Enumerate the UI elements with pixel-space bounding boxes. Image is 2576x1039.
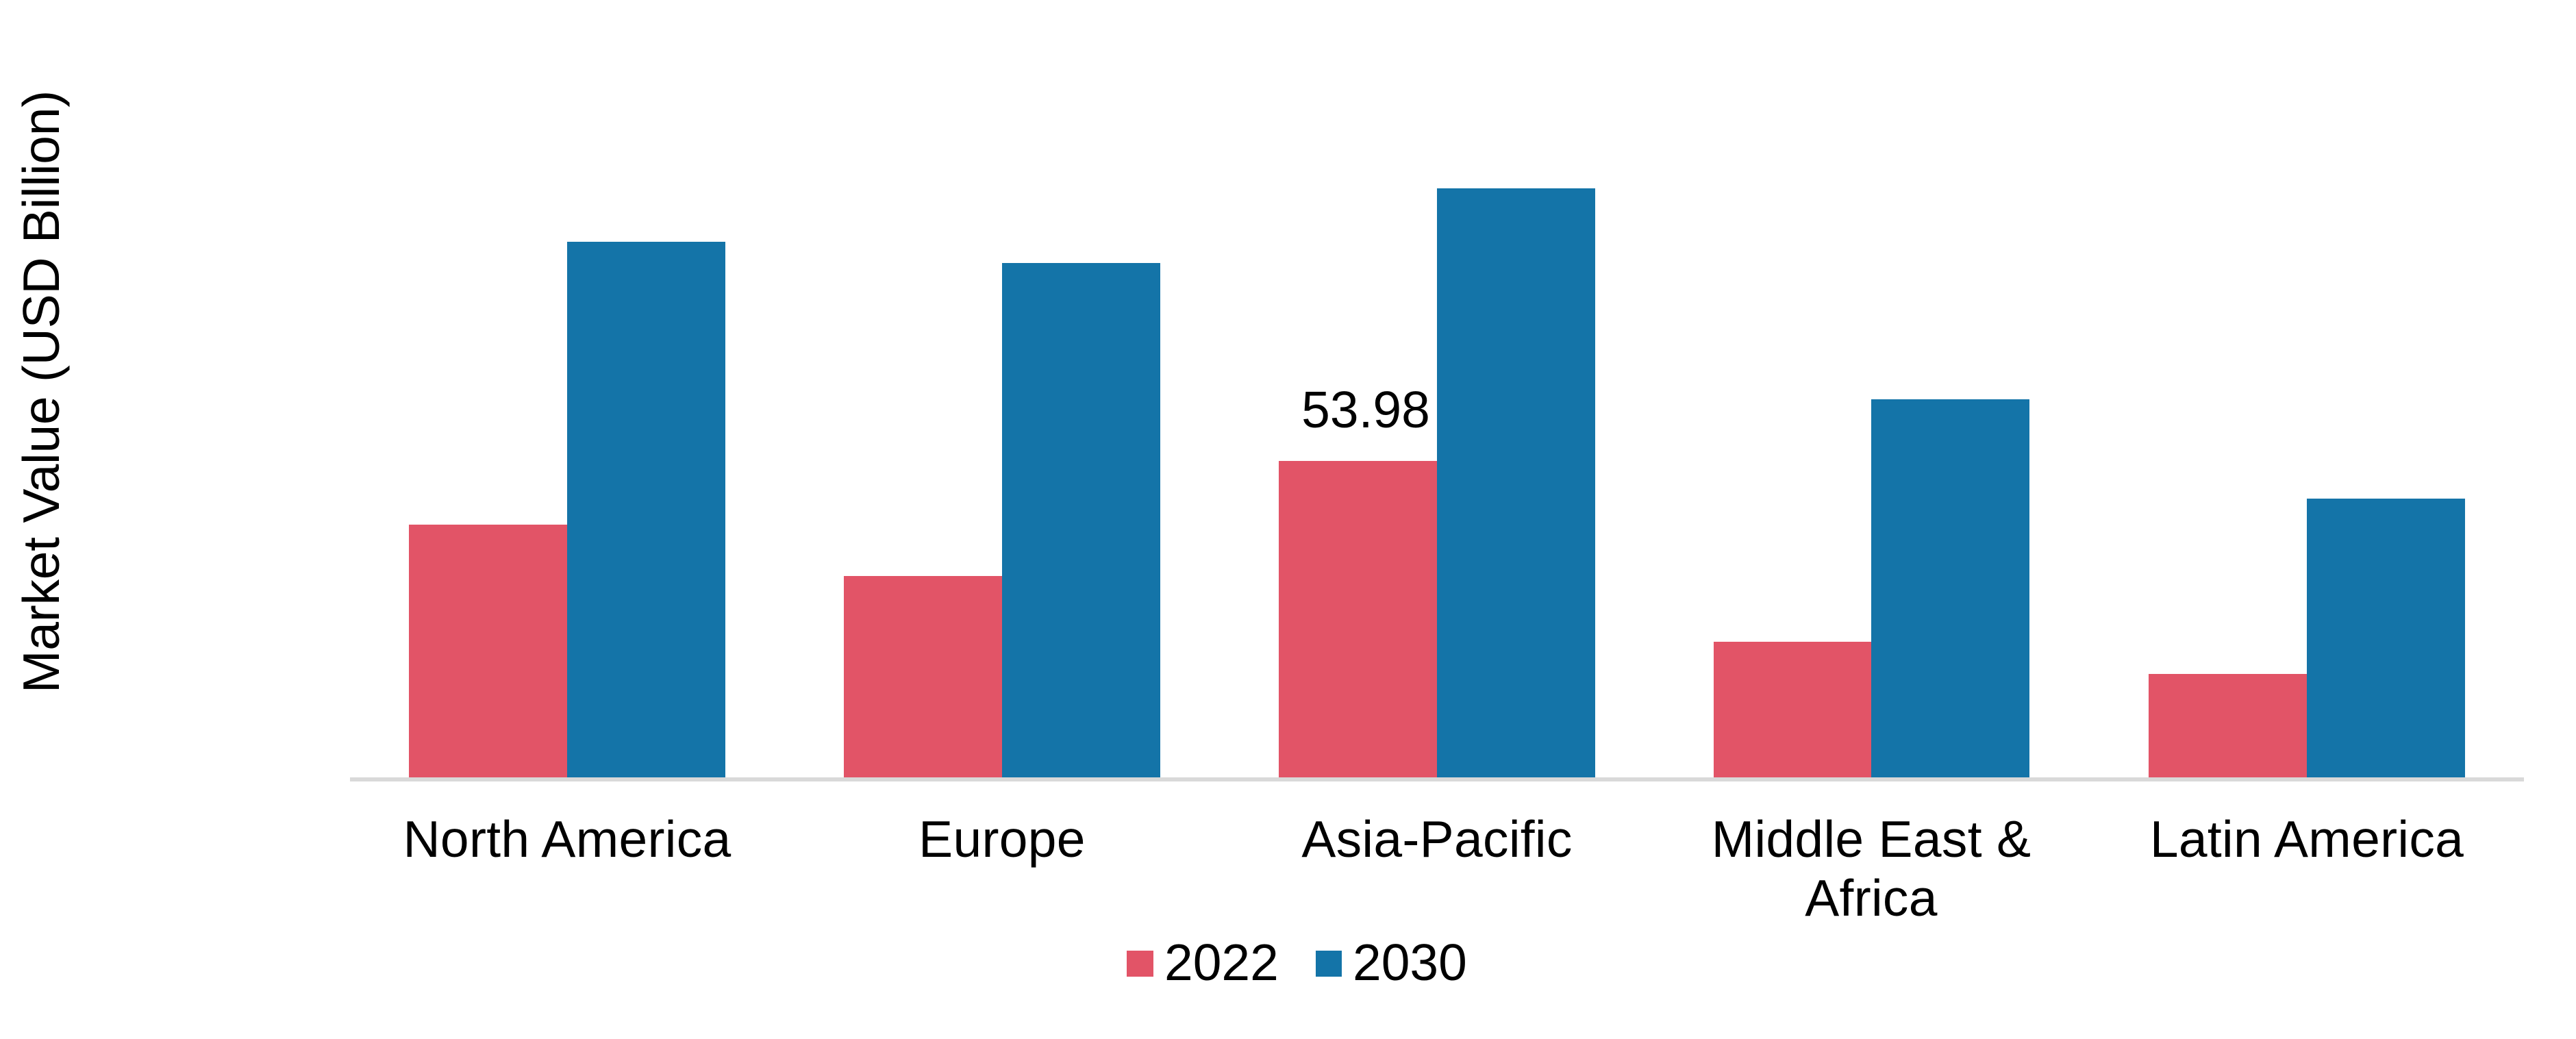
legend: 2030	[1353, 934, 1467, 991]
category labels: Asia-Pacific	[1301, 810, 1573, 868]
data label: Asia-Pacific 2022: 53.98	[1301, 381, 1430, 438]
legend: 2022	[1164, 934, 1279, 991]
category labels: Middle East &	[1712, 810, 2031, 868]
category labels: North America	[403, 810, 731, 868]
bars: Asia-Pacific	[1279, 188, 1595, 777]
x-axis line	[350, 777, 2524, 781]
bars: Middle East & Africa	[1714, 399, 2029, 777]
category labels	[403, 810, 2464, 927]
legend	[1127, 934, 1467, 991]
bars: Europe	[844, 263, 1160, 777]
bars: North America	[409, 242, 725, 777]
category labels: Latin America	[2150, 810, 2464, 868]
category labels: Africa	[1805, 869, 1938, 927]
category labels: Europe	[918, 810, 1086, 868]
y-axis title: Market Value (USD Billion)	[12, 90, 70, 693]
bars: Latin America	[2149, 499, 2465, 777]
